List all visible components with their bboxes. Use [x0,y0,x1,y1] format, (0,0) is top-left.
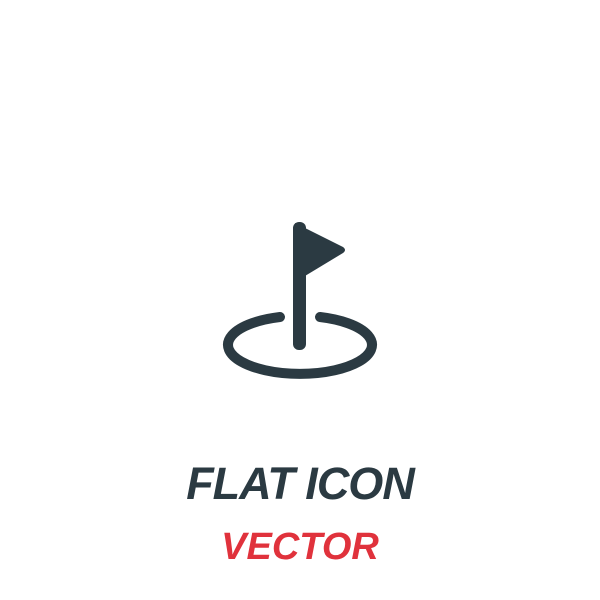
icon: flag pole [293,222,306,350]
subtitle: VECTOR [221,526,379,568]
icon: flag [295,223,345,279]
title: FLAT ICON [186,458,414,509]
icon: hole ring [228,317,372,374]
